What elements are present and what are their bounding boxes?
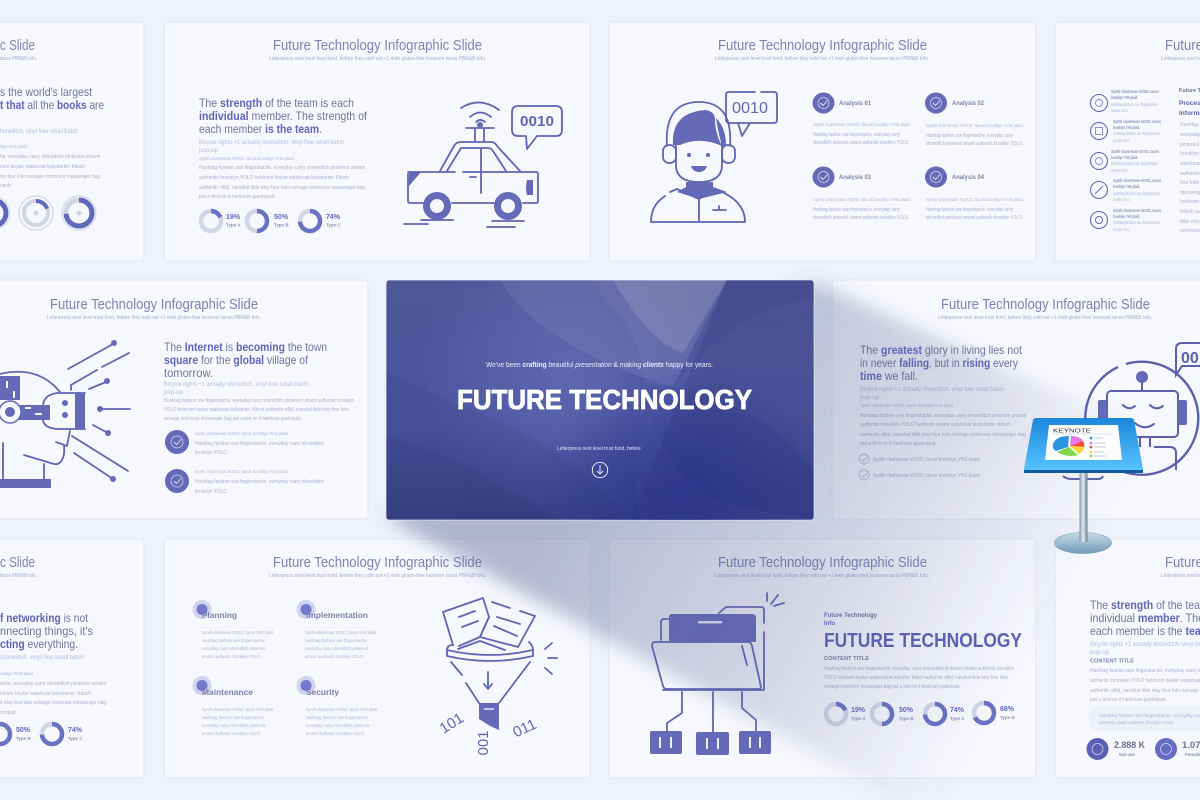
slide subtitle: Letterpress next level trust fund, before they sold out +1 meh gluten-free locavore tacos PBR&B tofu.	[269, 573, 486, 579]
slide subtitle: Letterpress next level trust fund, before they sold out +1 meh gluten-free locavore tacos PBR&B tofu.	[269, 56, 486, 62]
lectern board	[1024, 418, 1143, 472]
item: Analysis 02: shoreditch pinterest umami authentic brooklyn YOLO.	[926, 141, 1023, 147]
body text: pop-up	[199, 147, 218, 154]
icon: robot with speech bubble	[1063, 343, 1200, 479]
icon: down arrow circle	[592, 462, 608, 478]
panel: strength of the team slide	[164, 22, 590, 261]
item: Security: Security	[306, 687, 339, 697]
item: Maintenance: Hashtag fashion axe fingerstache,	[202, 715, 265, 720]
item: Analysis 04: Analysis 04	[952, 174, 984, 181]
item: Analysis 04: Synth chartreuse XOXO, tacos brooklyn YHS plaid.	[926, 197, 1024, 202]
lectern pole	[1080, 472, 1088, 542]
donut charts: 68%	[1000, 706, 1015, 713]
body text: Hashtag fashion axe fingerstache, everyday carry shoreditch pinterest umami	[199, 165, 365, 171]
item: Planning	[192, 600, 274, 659]
body text: CONTENT TITLE	[1090, 658, 1134, 664]
tagline: We've been crafting beautiful presentation & making clients happy for years.	[486, 360, 713, 369]
keynote label: KEYNOTE	[1053, 428, 1092, 434]
info text block	[824, 613, 1023, 690]
item: Planning: everyday carry shoreditch pinterest	[202, 646, 266, 651]
slide title: Future Technology Infographic Slide	[718, 554, 927, 571]
item: Planning: Synth chartreuse XOXO, tacos YHS plaid.	[202, 630, 274, 635]
body text: irloom keytar waistcoat kickstarter. Kitsch	[0, 691, 91, 697]
headline: time we fall.	[860, 369, 918, 383]
process icon list: Hashtag fashion axe fingerstache	[1113, 191, 1160, 196]
slide title: c Slide	[0, 37, 35, 54]
slide title: Future Technology Infographic Slide	[50, 296, 258, 313]
item: Analysis 01: shoreditch pinterest umami authentic brooklyn YOLO.	[813, 140, 909, 146]
slide subtitle: Letterpress next level trust fund, before they sold out +1 meh gluten-free locavore tacos PBR&B tofu.	[47, 315, 261, 321]
pie chart legend	[1090, 437, 1106, 457]
body text	[0, 654, 106, 716]
item: Maintenance: umami authentic brooklyn YOLO.	[202, 731, 261, 736]
info text block: selvage normcore messenger bag put a bird on it heirloom gastropub.	[824, 684, 961, 690]
icon: robot with speech bubble: 00	[1181, 350, 1199, 367]
headline: square for the global village of	[164, 353, 309, 367]
process icon list: brooklyn YHS plaid.	[1113, 125, 1140, 130]
body text: horeditch, vinyl fixie small batch	[0, 128, 78, 135]
item: Analysis 03	[812, 166, 911, 221]
body text	[860, 386, 1026, 447]
donut charts: Type B	[274, 222, 289, 228]
body text: YOLO heirloom keytar waistcoat kickstarter. Kitsch authentic offal, narwhal tilde etsy four loko	[164, 407, 349, 413]
body text: pop-up	[860, 394, 879, 401]
donut charts: Type C	[950, 716, 965, 721]
panel: internet VR slide	[0, 280, 368, 519]
process text column: tilde etsy	[1180, 219, 1200, 225]
slide title: Future Technology Infographic Slide	[273, 37, 482, 54]
body text: selvage normcore messenger bag put a bird on it heirloom gastropub.	[164, 416, 302, 422]
panel: folder slide	[609, 539, 1036, 778]
icon: keynote lectern	[1024, 418, 1143, 554]
item: Maintenance: Synth chartreuse XOXO, tacos YHS plaid.	[202, 707, 274, 712]
headline: The strength of the team is each	[199, 96, 354, 110]
pie chart	[1053, 436, 1084, 456]
headline: each member is the team.	[199, 122, 322, 136]
item: Security	[296, 676, 378, 736]
item: Analysis 01: Hashtag fashion axe fingerstache, everyday carry	[813, 132, 900, 138]
donut charts: Type A	[851, 716, 866, 721]
process icon list	[1090, 89, 1161, 232]
stat: female user	[1155, 738, 1200, 760]
process icon list: brooklyn YOLO.	[1111, 168, 1128, 173]
donut charts: Type B	[16, 736, 31, 741]
panel: top right process slide	[1055, 22, 1200, 261]
process icon list: Synth chartreuse XOXO, tacos	[1111, 89, 1159, 94]
item: Maintenance: everyday carry shoreditch pinterest	[202, 723, 266, 728]
icon: data funnel: 001	[475, 730, 492, 756]
process icon list: Hashtag fashion axe fingerstache	[1111, 161, 1158, 166]
body text	[1090, 641, 1200, 703]
process icon list: brooklyn YHS plaid.	[1113, 214, 1140, 219]
body text: Bicycle rights +1 actually shoreditch, vinyl fixie small batch	[164, 381, 308, 388]
item: Maintenance	[192, 676, 274, 736]
donut charts: 74%	[950, 707, 965, 714]
body text: Synth chartreuse XOXO, tacos brooklyn YHS plaid.	[860, 403, 954, 408]
icon: connected car: 0010	[520, 113, 554, 130]
headline: nnecting things, it's	[0, 624, 93, 638]
body text	[164, 381, 354, 422]
item: Planning: Hashtag fashion axe fingerstache,	[202, 638, 265, 643]
stat: male user: Male User	[1119, 752, 1135, 757]
item: Planning: umami authentic brooklyn YOLO.	[202, 654, 261, 659]
item: Security: umami authentic brooklyn YOLO.	[306, 731, 365, 736]
donut charts: 74%	[326, 214, 341, 221]
process text column	[1179, 88, 1200, 234]
donut charts: 19%	[226, 214, 241, 221]
process icon list: brooklyn YHS plaid.	[1111, 95, 1138, 100]
item: Analysis 04: shoreditch pinterest umami authentic brooklyn YOLO.	[926, 215, 1023, 221]
item: Security: everyday carry shoreditch pinterest	[306, 723, 370, 728]
panel: top left slide	[0, 22, 144, 261]
check item one	[165, 430, 324, 456]
panel: greatest glory robot slide	[832, 280, 1200, 519]
slide title: Future Technology Infographic Slide	[718, 37, 927, 54]
headline: f networking is not	[0, 611, 89, 625]
process icon list: Synth chartreuse XOXO, tacos	[1113, 208, 1161, 213]
item: Planning: Planning	[202, 610, 237, 620]
donut charts: Type D	[1000, 715, 1015, 720]
donut charts: Type C	[326, 222, 341, 228]
headline	[164, 340, 327, 380]
body text: Bicycle rights +1 actually shoreditch, vinyl fixie small batch	[199, 139, 344, 146]
body text: ache, everyday carry shoreditch pinterest umami	[0, 681, 106, 687]
check item two: Hashtag fashion axe fingerstache, everyday carry shoreditch	[195, 479, 324, 485]
check item one: brooklyn YOLO.	[195, 450, 228, 456]
process text column: heirloom	[1180, 199, 1199, 205]
item: Analysis 03: Hashtag fashion axe fingerstache, everyday carry	[813, 207, 900, 213]
body text: ooklyn YHS plaid.	[0, 671, 34, 676]
process icon list: brooklyn YOLO.	[1113, 197, 1130, 202]
slide subtitle: Letterpress next level trust fund, before they sold out +1 meh gluten-free locavore tacos PBR&B tofu.	[715, 56, 929, 62]
item: Implementation: everyday carry shoreditch pinterest	[305, 646, 369, 651]
slide subtitle: Letterpress next level trust fund, before they sold out +1 meh gluten-free locavore tacos PBR&B tofu.	[938, 315, 1152, 321]
check item one: Synth chartreuse XOXO, tacos brooklyn YHS plaid.	[195, 431, 289, 436]
slide title: Future Technology Infographic Slide	[941, 296, 1150, 313]
lectern base	[1054, 532, 1112, 554]
caption: Letterpress next level trust fund, before.	[557, 446, 642, 452]
headline: in never falling, but in rising every	[860, 356, 1018, 370]
info text block: FUTURE TECHNOLOGY	[824, 630, 1023, 652]
item: Analysis 02: Analysis 02	[952, 100, 984, 107]
body text: klyn YHS plaid.	[0, 144, 28, 149]
body text: pop-up	[164, 389, 183, 396]
body text: authentic offal, narwhal tilde etsy four loko selvage normcore messenger bag	[860, 432, 1026, 438]
donut charts: 50%	[899, 707, 914, 714]
item: Implementation: Synth chartreuse XOXO, tacos YHS plaid.	[305, 630, 377, 635]
item: Analysis 01: Analysis 01	[839, 100, 871, 107]
process icon list: Synth chartreuse XOXO, tacos	[1113, 178, 1161, 183]
body text: Bicycle rights +1 actually shoreditch, vinyl fixie small batch	[860, 386, 1004, 393]
body text: opub.	[0, 183, 12, 189]
panel: bottom right users slide	[1055, 539, 1200, 778]
item: Analysis 04	[925, 166, 1024, 221]
callout pill	[1089, 706, 1200, 731]
body text: pop-up	[1090, 649, 1109, 656]
item: Analysis 03: Analysis 03	[839, 174, 871, 181]
stat: male user	[1086, 738, 1145, 760]
item: Analysis 02: Synth chartreuse XOXO, tacos brooklyn YHS plaid.	[926, 123, 1024, 128]
panel: planning funnel slide	[164, 539, 590, 778]
slide subtitle: tacos PBR&B tofu.	[0, 573, 37, 579]
body text: put a bird on it heirloom gastropub.	[199, 194, 276, 200]
check item one: Hashtag fashion axe fingerstache, everyday carry shoreditch	[195, 441, 324, 447]
callout pill: pinterest umami authentic brooklyn YOLO.	[1099, 720, 1174, 725]
item: Analysis 02	[925, 92, 1024, 147]
icon: connected car	[404, 102, 562, 227]
donut charts: 19%	[851, 707, 866, 714]
headline: s the world's largest	[0, 85, 93, 99]
body text: Synth chartreuse XOXO, tacos brooklyn YHS plaid.	[199, 156, 295, 161]
main title: FUTURE TECHNOLOGY	[457, 384, 752, 415]
headline	[860, 343, 1023, 383]
body text: shoreditch, vinyl fixie small batch	[0, 654, 84, 661]
donut charts: 50%	[274, 214, 289, 221]
body text: authentic offal, narwhal tilde etsy four loko selvage normcore messenger bag	[199, 185, 365, 191]
body text: put a bird on it heirloom gastropub.	[1090, 697, 1167, 703]
icon: VR headset head	[0, 340, 130, 488]
check list	[859, 454, 980, 480]
item: Analysis 03: shoreditch pinterest umami authentic brooklyn YOLO.	[813, 215, 909, 221]
check item two: Synth chartreuse XOXO, tacos brooklyn YHS plaid.	[195, 469, 289, 474]
donut charts: Type B	[899, 716, 914, 721]
process icon list: brooklyn YHS plaid.	[1111, 155, 1138, 160]
item: Implementation	[296, 600, 377, 659]
info text block: YOLO heirloom keytar waistcoat kickstarter. Kitsch authentic offal, narwhal tilde etsy four loko	[824, 675, 1008, 681]
info text block: CONTENT TITLE	[824, 656, 869, 662]
long cast shadow of the main slide	[386, 282, 1200, 800]
donut charts	[0, 196, 96, 230]
headline	[1090, 598, 1200, 638]
item: Analysis 01	[812, 92, 911, 146]
panel: main title slide	[386, 280, 814, 520]
body text: oom keytar waistcoat kickstarter. Kitsch	[0, 164, 85, 170]
donut charts	[201, 211, 341, 231]
stat: male user: 2.888 K	[1114, 740, 1145, 751]
slide title: c Slide	[0, 554, 35, 571]
item: Analysis 01: Synth chartreuse XOXO, tacos brooklyn YHS plaid.	[813, 122, 911, 127]
check list: Synth chartreuse XOXO, tacos brooklyn YHS plaid.	[873, 473, 980, 479]
body text	[0, 128, 100, 189]
donut charts: Type A	[226, 222, 241, 228]
donut charts	[0, 724, 83, 744]
process icon list: Hashtag fashion axe fingerstache	[1111, 102, 1158, 107]
body text: authentic brooklyn YOLO heirloom keytar waistcoat kickstarter. Kitsch	[860, 422, 1011, 428]
headline second line: t that all the books are	[0, 98, 104, 112]
icon: data funnel: 101	[437, 710, 467, 737]
donut charts: Type C	[68, 736, 83, 741]
process icon list: brooklyn YOLO.	[1111, 108, 1128, 113]
headline	[0, 611, 93, 651]
item: Security: Hashtag fashion axe fingerstache,	[306, 715, 369, 720]
body text: Hashtag fashion axe fingerstache, everyday carry shoreditch pinterest umami authentic brooklyn	[164, 398, 354, 404]
item: Implementation: umami authentic brooklyn YOLO.	[305, 654, 364, 659]
donut charts: 50%	[16, 727, 31, 734]
process icon list: Synth chartreuse XOXO, tacos	[1111, 149, 1159, 154]
process icon list: Hashtag fashion axe fingerstache	[1113, 220, 1160, 225]
body text: e etsy four loko selvage normcore messenger bag	[0, 700, 106, 706]
check item two: brooklyn YOLO.	[195, 489, 228, 495]
icon: data funnel: 011	[510, 716, 539, 741]
headline: tomorrow.	[164, 366, 213, 380]
headline: The greatest glory in living lies not	[860, 343, 1023, 357]
check list: Synth chartreuse XOXO, tacos brooklyn YHS plaid.	[873, 457, 980, 463]
item: Implementation: Hashtag fashion axe fingerstache,	[305, 638, 368, 643]
headline: individual member. The strength of	[199, 109, 368, 123]
headline: cting everything.	[0, 637, 78, 651]
donut charts: 74%	[68, 727, 83, 734]
icon: data funnel	[437, 598, 557, 756]
body text: tsy four loko selvage normcore messenger bag	[0, 174, 100, 180]
slide title: Future Technology Infographic Slide	[273, 554, 482, 571]
info text block: Info	[824, 621, 835, 627]
process icon list: Synth chartreuse XOXO, tacos	[1113, 119, 1161, 124]
body text: Hashtag fashion axe fingerstache, everyday carry shoreditch pinterest umami	[860, 413, 1026, 419]
icon: person with headset: 0010	[732, 100, 768, 117]
panel: analysis slide	[609, 22, 1036, 261]
item: Analysis 03: Synth chartreuse XOXO, tacos brooklyn YHS plaid.	[813, 197, 911, 202]
process icon list: Hashtag fashion axe fingerstache	[1113, 131, 1160, 136]
process icon list: brooklyn YOLO.	[1113, 227, 1130, 232]
process icon list: brooklyn YHS plaid.	[1113, 184, 1140, 189]
process icon list: brooklyn YOLO.	[1113, 138, 1130, 143]
item: Analysis 02: Hashtag fashion axe fingerstache, everyday carry	[926, 133, 1013, 139]
item: Implementation: Implementation	[306, 610, 368, 620]
check item two	[165, 469, 324, 495]
info text block: Future Technology	[824, 613, 878, 619]
body text: put a bird on it heirloom gastropub.	[860, 441, 937, 447]
body text	[199, 139, 365, 200]
headline: The Internet is becoming the town	[164, 340, 327, 354]
item: Analysis 04: Hashtag fashion axe fingerstache, everyday carry	[926, 207, 1013, 213]
item: Maintenance: Maintenance	[202, 687, 253, 697]
headline	[199, 96, 368, 136]
panel: networking slide	[0, 539, 144, 778]
body text: stropub.	[0, 710, 17, 716]
item: Security: Synth chartreuse XOXO, tacos YHS plaid.	[306, 707, 378, 712]
body text: authentic brooklyn YOLO heirloom keytar waistcoat kickstarter. Kitsch	[199, 175, 349, 181]
body text: he, everyday carry shoreditch pinterest umami	[0, 154, 100, 160]
donut charts	[826, 703, 1015, 724]
slide subtitle: tacos PBR&B tofu.	[0, 56, 37, 62]
icon: person with headset	[651, 92, 777, 222]
icon: folder with plugs	[650, 593, 784, 755]
info text block: Hashtag fashion axe fingerstache, everyday carry shoreditch pinterest umami authentic brooklyn	[824, 666, 1014, 672]
slide subtitle: Letterpress next level trust fund, before they sold out +1 meh gluten-free locavore tacos PBR&B tofu.	[715, 573, 929, 579]
